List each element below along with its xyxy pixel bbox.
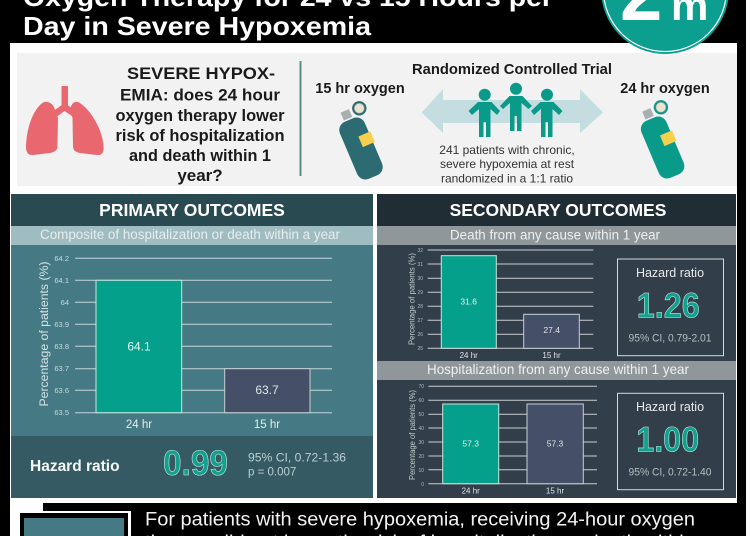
hazard ratio: death — [618, 259, 724, 356]
bar chart: composite outcome — [39, 254, 332, 431]
bar chart: hospitalization: 40 — [418, 426, 424, 432]
bar chart: death: 31 — [417, 262, 423, 268]
bar chart: composite outcome: 63.7 — [54, 364, 69, 373]
bar chart: death: 29 — [417, 290, 423, 296]
patient description: 241 patients with chronic, — [439, 143, 575, 157]
hazard ratio: death: 1.26 — [637, 286, 700, 325]
bar chart: death: 27.4 — [543, 325, 560, 335]
hazard ratio: primary: 0.99 — [163, 444, 228, 483]
research question: risk of hospitalization — [116, 126, 284, 145]
icon: lungs — [26, 86, 104, 155]
heading: primary outcomes: PRIMARY OUTCOMES — [99, 200, 285, 220]
subheading: hospitalization: Hospitalization from any cause within 1 year — [427, 361, 689, 377]
bar chart: death: 26 — [417, 332, 423, 338]
bar chart: composite outcome: 63.5 — [54, 408, 69, 417]
logo: 2 minute badge — [601, 0, 729, 54]
hazard ratio: primary: p = 0.007 — [248, 466, 296, 478]
research question: oxygen therapy lower — [116, 106, 285, 125]
patient description — [439, 143, 575, 186]
bar chart: hospitalization: 50 — [418, 412, 424, 418]
bar chart: hospitalization: 57.3 — [547, 439, 564, 449]
hazard ratio: hospitalization: 95% CI, 0.72-1.40 — [628, 467, 712, 479]
bar chart: death: Percentage of patients (%) — [406, 253, 416, 345]
panel: primary outcomes — [11, 194, 373, 498]
hazard ratio: hospitalization: 1.00 — [636, 421, 699, 460]
bar chart: composite outcome: 64.1 — [127, 340, 151, 354]
conclusion thumbnail — [24, 518, 124, 536]
bar chart: hospitalization: Percentage of patients (%) — [407, 390, 417, 480]
conclusion text: For patients with severe hypoxemia, receiving 24-hour oxygen — [145, 510, 695, 531]
bar chart: composite outcome: 64.1 — [54, 276, 69, 285]
patient description: severe hypoxemia at rest — [440, 157, 575, 171]
bar chart: hospitalization — [407, 384, 597, 496]
bar chart: hospitalization: 57.3 — [462, 439, 479, 449]
panel: study overview — [17, 53, 737, 186]
bar chart: death: 27 — [417, 318, 423, 324]
bar chart: hospitalization: 60 — [418, 398, 424, 404]
label: trial type: Randomized Controlled Trial — [412, 61, 612, 78]
hazard ratio: primary: Hazard ratio — [30, 458, 120, 475]
title: Day in Severe Hypoxemia — [23, 11, 372, 41]
bar chart: composite outcome: Percentage of patients (%) — [39, 261, 51, 406]
icon: patients — [468, 83, 562, 137]
bar chart: hospitalization: 30 — [418, 440, 424, 446]
hazard ratio: death: Hazard ratio — [636, 266, 704, 280]
panel: conclusion — [20, 503, 737, 536]
bar chart: composite outcome: 64.2 — [54, 254, 69, 263]
bar chart: composite outcome: 63.6 — [54, 386, 69, 395]
bar chart: hospitalization: 0 — [421, 482, 424, 488]
hazard ratio: primary — [11, 436, 373, 498]
hazard ratio: hospitalization — [618, 393, 724, 490]
hazard ratio: primary: 95% CI, 0.72-1.36 — [248, 452, 346, 464]
bar chart: hospitalization: 70 — [418, 384, 424, 390]
hazard ratio: hospitalization: Hazard ratio — [636, 400, 704, 414]
label: 24 hr oxygen: 24 hr oxygen — [620, 81, 710, 97]
icon: oxygen tank 24 hr — [638, 100, 687, 181]
label: 15 hr oxygen: 15 hr oxygen — [315, 81, 405, 97]
bar chart: composite outcome: 24 hr — [126, 419, 152, 431]
bar chart: hospitalization: 20 — [418, 454, 424, 460]
hazard ratio: death: 95% CI, 0.79-2.01 — [628, 333, 712, 345]
bar chart: death: 31.6 — [460, 296, 477, 306]
icon: oxygen tank 15 hr — [336, 101, 386, 182]
bar chart: hospitalization: 15 hr — [546, 486, 564, 496]
research question — [116, 64, 285, 185]
research question: and death within 1 — [129, 146, 271, 165]
bar chart: hospitalization: 24 hr — [462, 486, 480, 496]
bar chart: composite outcome: 63.7 — [255, 383, 279, 397]
bar chart: death: 32 — [417, 248, 423, 254]
panel: secondary outcomes — [377, 194, 736, 498]
bar chart: hospitalization: 10 — [418, 468, 424, 474]
bar chart: composite outcome: 63.9 — [54, 320, 69, 329]
bar chart: death: 25 — [417, 346, 423, 352]
bar chart: death: 15 hr — [542, 351, 561, 360]
research question: EMIA: does 24 hour — [120, 86, 280, 104]
bar chart: composite outcome: 63.8 — [54, 342, 69, 351]
research question: SEVERE HYPOX- — [127, 64, 275, 83]
bar chart: death: 30 — [417, 276, 423, 282]
subheading: composite: Composite of hospitalization or death within a year — [40, 227, 340, 242]
subheading: death: Death from any cause within 1 year — [450, 226, 660, 242]
bar chart: composite outcome: 15 hr — [254, 419, 280, 431]
research question: year? — [177, 166, 223, 185]
patient description: randomized in a 1:1 ratio — [441, 172, 573, 186]
bar chart: composite outcome: 64 — [61, 298, 69, 307]
bar chart: death: 28 — [417, 304, 423, 310]
arrow: randomization — [422, 89, 603, 133]
bar chart: death: 24 hr — [460, 351, 478, 360]
heading: secondary outcomes: SECONDARY OUTCOMES — [450, 200, 666, 220]
bar chart: death — [406, 248, 593, 360]
title — [23, 0, 553, 41]
